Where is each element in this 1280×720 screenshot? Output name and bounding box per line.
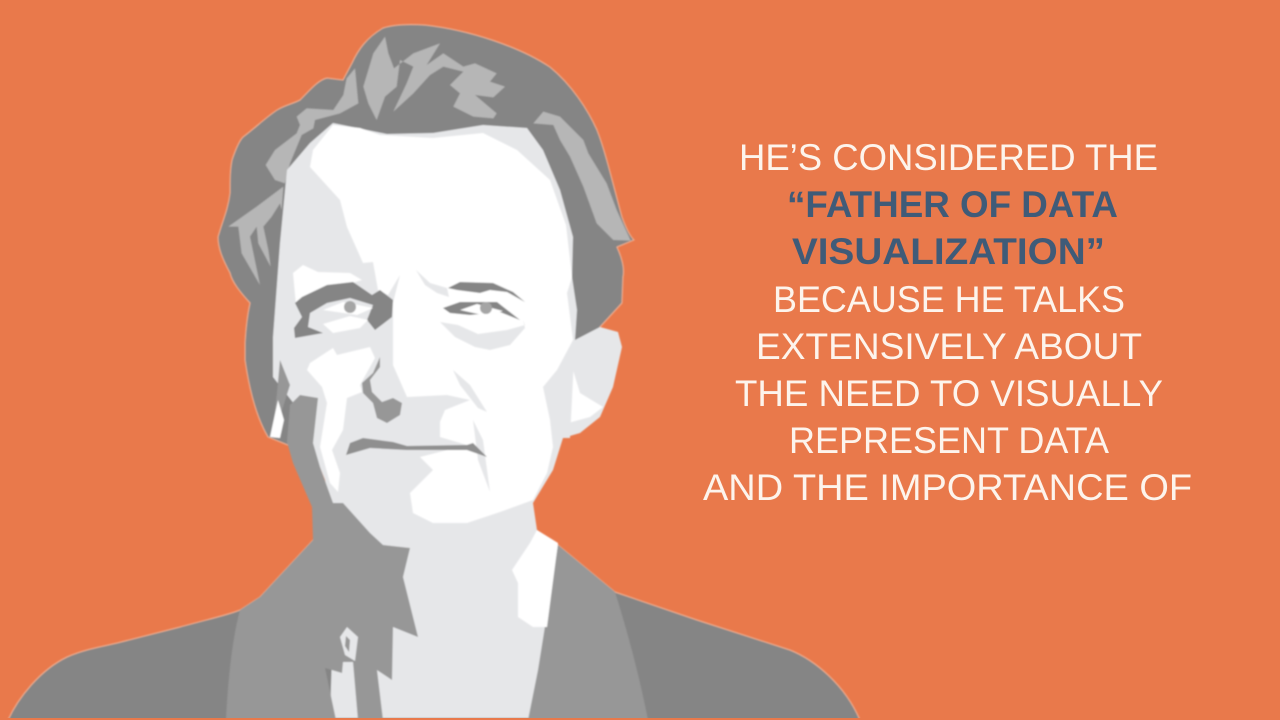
shadow under right eye	[440, 320, 525, 350]
highlighted title	[787, 184, 1118, 272]
brow highlight	[293, 265, 362, 305]
left eye	[323, 301, 373, 315]
right eye	[443, 302, 520, 320]
jacket	[8, 540, 860, 720]
collar notch	[340, 627, 358, 661]
neck and lapel	[226, 395, 418, 720]
face and shirt base	[273, 123, 577, 718]
explanation text: REPRESENT DATA	[789, 420, 1109, 461]
right lapel	[528, 545, 648, 720]
right lock highlight	[533, 112, 631, 241]
quote text	[703, 137, 1192, 508]
top tuft highlight	[363, 37, 505, 120]
nose shadow	[362, 357, 402, 423]
right brow	[448, 282, 525, 302]
highlighted title: VISUALIZATION”	[792, 231, 1105, 272]
sideburn shadow	[276, 360, 290, 410]
ear	[569, 326, 623, 437]
left cheek highlight	[307, 347, 375, 492]
explanation text: BECAUSE HE TALKS	[773, 279, 1125, 320]
collar notch shadow	[345, 636, 350, 652]
highlighted title: “FATHER OF DATA	[787, 184, 1118, 225]
portrait illustration	[8, 24, 860, 720]
shirt highlight	[512, 530, 558, 627]
intro line: HE’S CONSIDERED THE	[739, 137, 1158, 178]
wrinkle shadows	[416, 270, 490, 492]
left brow and eye socket	[294, 282, 393, 338]
left band highlight	[266, 68, 358, 183]
explanation text: AND THE IMPORTANCE OF	[703, 467, 1192, 508]
explanation text: EXTENSIVELY ABOUT	[756, 326, 1142, 367]
explanation text: THE NEED TO VISUALLY	[735, 373, 1163, 414]
white sliver at jaw	[270, 400, 284, 438]
lower left lock highlight	[228, 187, 283, 285]
mouth	[346, 438, 487, 457]
hair and head silhouette	[218, 24, 634, 450]
under left eye	[323, 316, 368, 333]
explanation text	[703, 279, 1192, 508]
ear highlight	[570, 374, 602, 422]
hair highlights	[228, 37, 631, 285]
forehead and right face highlight	[310, 125, 573, 523]
